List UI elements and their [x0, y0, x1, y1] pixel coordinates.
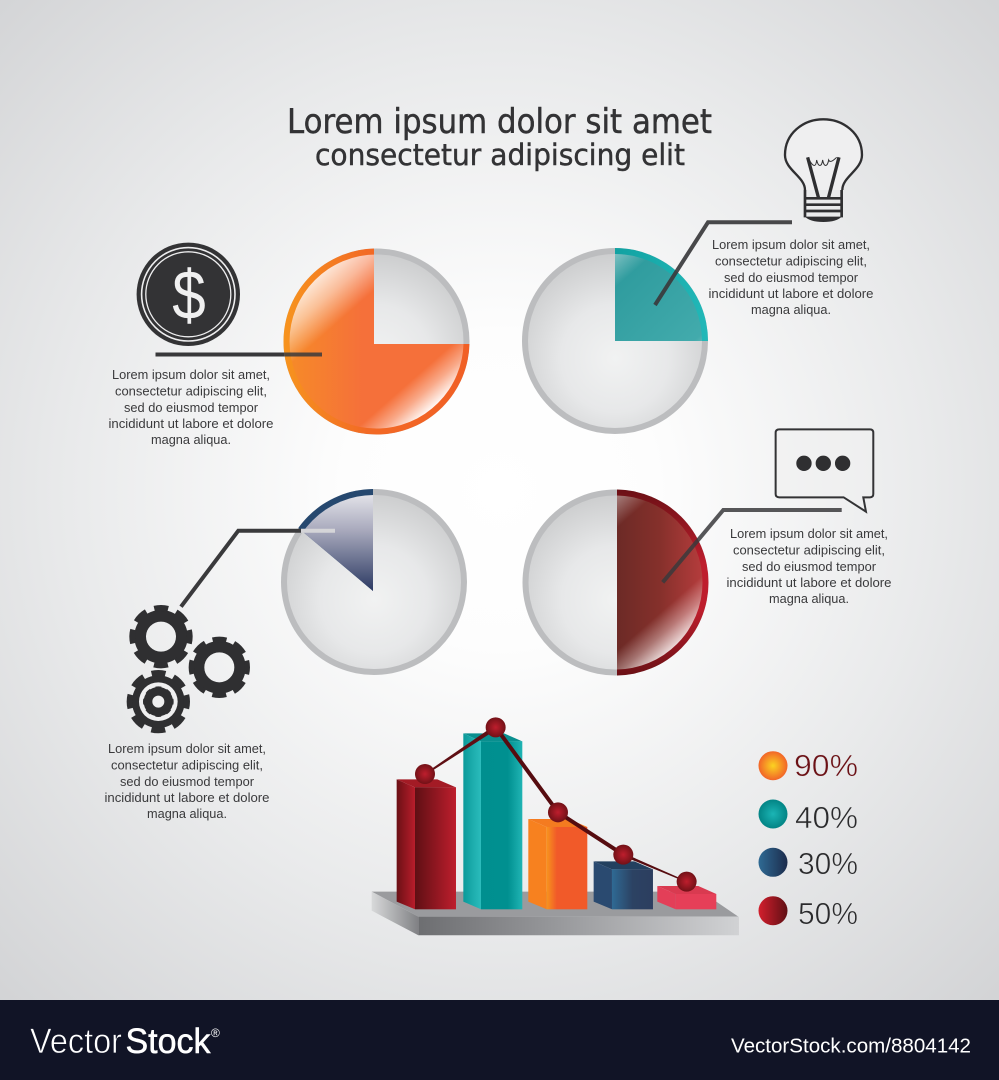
gear bottom [130, 673, 187, 730]
icon: light bulb [785, 119, 862, 222]
text block: speech bubble: Lorem ipsum dolor sit amet, [730, 527, 888, 541]
title [287, 102, 712, 172]
legend item: 30%: 30% [798, 846, 858, 881]
text block: dollar: incididunt ut labore et dolore [108, 417, 274, 431]
text block: bulb [708, 238, 874, 317]
text block: speech bubble: magna aliqua. [769, 592, 849, 606]
text block: bulb: consectetur adipiscing elit, [715, 254, 867, 268]
footer band [0, 1000, 999, 1080]
connector: dollar to orange pie [156, 352, 322, 356]
chart platform [372, 892, 739, 935]
text block: gears: magna aliqua. [147, 807, 227, 821]
legend item: 50%: 50% [798, 896, 858, 931]
connector: bulb to teal pie [655, 222, 792, 305]
connector: gears to navy pie [181, 531, 335, 607]
trend line [425, 725, 687, 882]
text block: gears [104, 742, 270, 821]
text block: gears: sed do eiusmod tempor [120, 775, 254, 789]
text block: bulb: incididunt ut labore et dolore [708, 287, 874, 301]
footer id: VectorStock.com/8804142 [731, 1036, 971, 1058]
text block: bulb: sed do eiusmod tempor [724, 271, 858, 285]
legend item: 90%: 90% [794, 748, 858, 783]
icon: dollar coin [137, 243, 240, 346]
text block: bulb: Lorem ipsum dolor sit amet, [712, 238, 870, 252]
connector: speech bubble to red pie [663, 510, 842, 582]
panel: red pie chart [522, 490, 708, 676]
title: Lorem ipsum dolor sit amet [287, 102, 712, 142]
title: consectetur adipiscing elit [315, 138, 685, 172]
text block: dollar: consectetur adipiscing elit, [115, 384, 267, 398]
text block: dollar [108, 368, 274, 447]
panel: teal pie chart [522, 248, 708, 434]
bar: navy [594, 861, 653, 909]
legend item: 40% [758, 800, 858, 835]
legend item: 30% [758, 846, 858, 881]
footer logo: Stock [126, 1022, 211, 1061]
text block: gears: Lorem ipsum dolor sit amet, [108, 742, 266, 756]
text block: speech bubble: sed do eiusmod tempor [742, 560, 876, 574]
legend item: 50% [758, 896, 858, 931]
icon: gears [130, 608, 247, 730]
text block: dollar: Lorem ipsum dolor sit amet, [112, 368, 270, 382]
bar: red [397, 779, 456, 909]
text block: dollar: sed do eiusmod tempor [124, 401, 258, 415]
text block: speech bubble: incididunt ut labore et dolore [726, 576, 892, 590]
panel: orange pie chart [284, 248, 470, 434]
text block: speech bubble: consectetur adipiscing elit, [733, 544, 885, 558]
text block: dollar: magna aliqua. [151, 433, 231, 447]
legend item: 90% [758, 748, 858, 783]
trend markers [415, 717, 697, 892]
legend item: 40%: 40% [795, 800, 858, 835]
footer logo [30, 1022, 220, 1061]
legend [758, 748, 858, 931]
text block: gears: consectetur adipiscing elit, [111, 758, 263, 772]
icon: dollar coin: $ [172, 256, 206, 334]
gear right [191, 639, 247, 695]
text block: bulb: magna aliqua. [751, 303, 831, 317]
text block: speech bubble [726, 527, 892, 606]
panel: navy pie chart [281, 489, 467, 675]
bar: teal [463, 733, 522, 909]
bar: orange [528, 819, 587, 909]
text block: gears: incididunt ut labore et dolore [104, 791, 270, 805]
footer logo: Vector [30, 1022, 122, 1061]
bar chart [372, 717, 739, 935]
icon: speech bubble [776, 429, 873, 512]
footer logo: ® [211, 1026, 220, 1040]
gear top [132, 608, 190, 665]
bar: pink [657, 886, 716, 909]
